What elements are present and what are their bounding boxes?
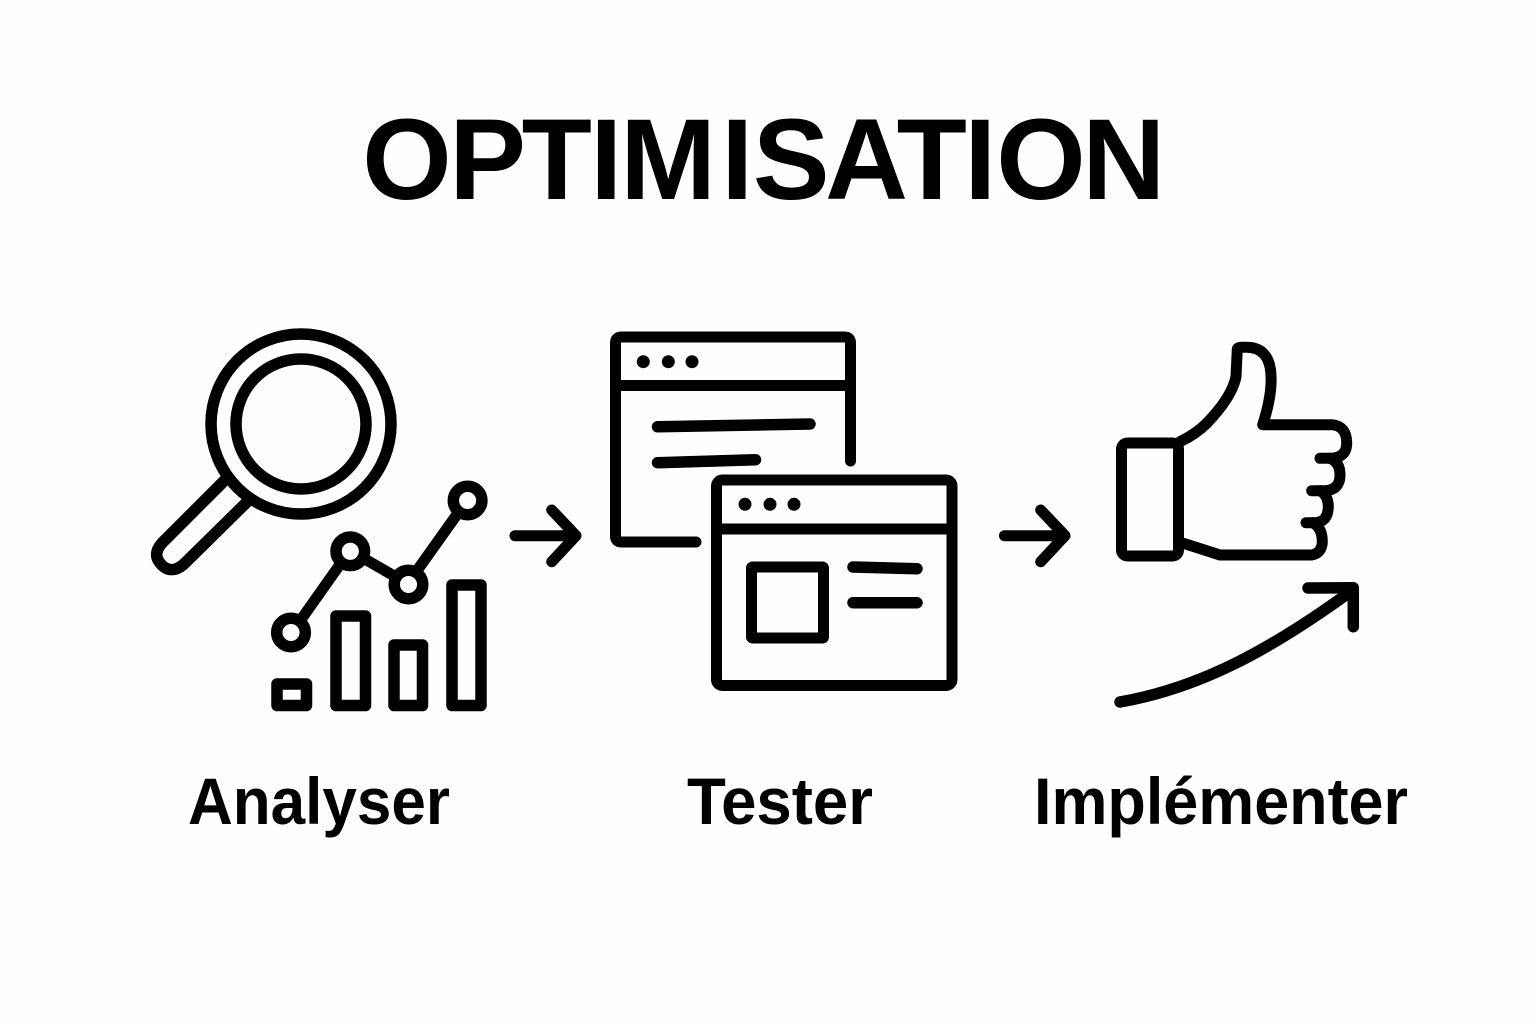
arrow: tester to implementer	[1004, 510, 1065, 562]
label: Tester: Tester	[687, 764, 873, 838]
icon: line and bar chart	[277, 486, 482, 706]
title: OPTIMISATION	[362, 96, 1165, 224]
icon: back browser window	[616, 337, 850, 542]
icon: front browser window	[716, 480, 952, 686]
label: Analyser: Analyser	[188, 764, 450, 838]
icon: rising arrow	[1120, 588, 1353, 702]
icon: thumbs up	[1122, 347, 1347, 556]
arrow: analyser to tester	[515, 510, 576, 562]
icon: magnifying glass	[157, 334, 391, 570]
label: Implémenter: Implémenter	[1034, 764, 1408, 838]
